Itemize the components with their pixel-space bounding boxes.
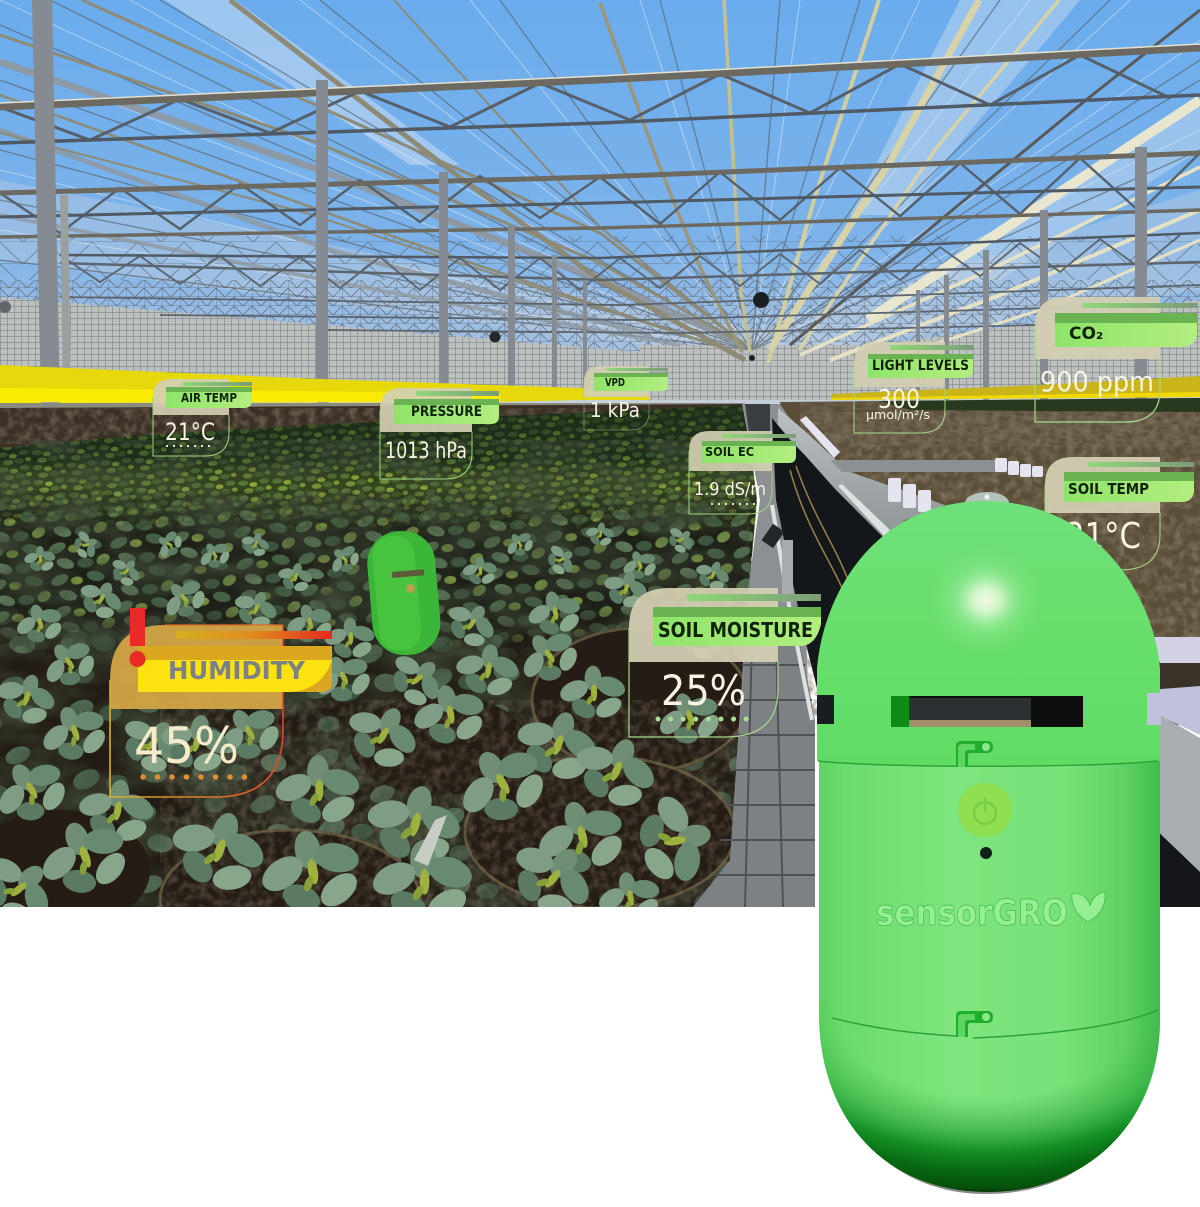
badge: soil temp: SOIL TEMP — [1068, 480, 1149, 498]
lower cap shading — [819, 1000, 1160, 1192]
light sensor dome — [965, 492, 1009, 514]
badge: air temp: AIR TEMP — [181, 391, 237, 405]
gutter beams — [0, 62, 745, 345]
badge: pressure: PRESSURE — [411, 404, 482, 420]
small sensor in field — [365, 528, 443, 658]
keyhole clip upper — [956, 741, 993, 767]
sky through glass roof — [0, 0, 1200, 405]
badge: soil moisture: SOIL MOISTURE — [658, 618, 813, 642]
sensor button — [406, 584, 415, 593]
grey kerb under yellow band — [0, 403, 745, 408]
middle plants — [0, 490, 757, 660]
central bench aisle — [693, 404, 845, 907]
badge: co2: CO₂ — [1069, 324, 1103, 344]
badge: light levels — [854, 342, 973, 433]
top window slot — [891, 696, 1083, 727]
badge: light levels: LIGHT LEVELS — [872, 358, 969, 374]
seam upper — [818, 761, 1158, 766]
white background below photo — [0, 907, 1200, 1207]
bench top rail — [778, 408, 945, 538]
plant label stake — [414, 815, 447, 866]
side notch right — [1147, 693, 1161, 725]
badge: air temp — [153, 379, 252, 456]
tray light rail — [772, 505, 812, 720]
far left soil strip — [0, 404, 745, 450]
near plants — [0, 600, 748, 907]
right glass wall — [755, 300, 1200, 400]
seam lower — [832, 1010, 1158, 1038]
badge: vpd — [584, 366, 668, 430]
seedling clusters — [0, 520, 735, 941]
badge: vpd: VPD — [605, 377, 625, 389]
tan purlins — [230, 0, 745, 360]
truss webs — [0, 55, 1170, 140]
black gap under bench — [772, 418, 885, 700]
far field tint — [0, 405, 757, 560]
badge: light levels: 300 — [878, 385, 920, 415]
soil texture — [0, 440, 750, 907]
dome highlight — [924, 542, 1048, 658]
badge: soil temp — [1045, 457, 1194, 570]
badge: soil moisture: 25% — [661, 666, 746, 715]
left glass wall — [0, 297, 755, 400]
badge: soil ec — [689, 431, 796, 514]
bench tray grid — [693, 640, 815, 907]
woven basket pots — [0, 628, 748, 970]
badge: air temp: 21°C — [165, 418, 215, 446]
side notch left — [817, 695, 834, 724]
left hand plant field — [0, 405, 757, 907]
truss lattice far distance — [0, 280, 1200, 366]
badge: humidity alert — [110, 608, 332, 797]
sensor slot — [392, 569, 424, 578]
badge: humidity alert: HUMIDITY — [168, 656, 306, 685]
capsule body — [817, 501, 1160, 1192]
sensorGRO device — [817, 492, 1161, 1194]
logo: sensorGRO — [876, 893, 1068, 934]
vertical columns — [32, 0, 1147, 412]
right hand far beds — [780, 398, 1200, 725]
truss lattice middle distance — [0, 236, 1200, 280]
indicator hole — [980, 847, 992, 859]
capsule body — [365, 528, 443, 658]
icon: red alert mark — [130, 608, 146, 667]
thin steel rafters — [0, 0, 1200, 350]
glass reflection strips — [165, 0, 460, 165]
badge: pressure — [380, 388, 499, 479]
ventilation fans — [753, 292, 769, 308]
badge: humidity alert: 45% — [134, 717, 239, 775]
badge: soil temp: 21°C — [1065, 516, 1141, 557]
power button — [958, 783, 1012, 837]
badge: vpd: 1 kPa — [590, 398, 640, 422]
badge: soil ec: 1.9 dS/m — [694, 479, 766, 500]
white pots row — [800, 416, 1043, 512]
yellow screen bands — [0, 365, 650, 403]
right edge pots and bench — [1150, 637, 1200, 663]
column bases — [41, 402, 60, 437]
keyhole clip lower — [956, 1011, 993, 1037]
badge: co2 — [1035, 297, 1197, 422]
roof glazing bars — [0, 0, 1200, 368]
upper dome shading — [817, 501, 1160, 766]
truss chords — [0, 48, 1200, 107]
bench support — [762, 524, 784, 548]
far end wall — [640, 345, 860, 400]
badge: co2: 900 ppm — [1040, 365, 1154, 398]
badge: soil moisture — [629, 588, 821, 737]
badge: pressure: 1013 hPa — [385, 439, 467, 464]
soft ground shadow — [820, 1020, 1100, 1194]
far plants — [0, 405, 757, 600]
badge: light levels: µmol/m²/s — [866, 408, 930, 422]
badge: soil ec: SOIL EC — [705, 445, 754, 459]
